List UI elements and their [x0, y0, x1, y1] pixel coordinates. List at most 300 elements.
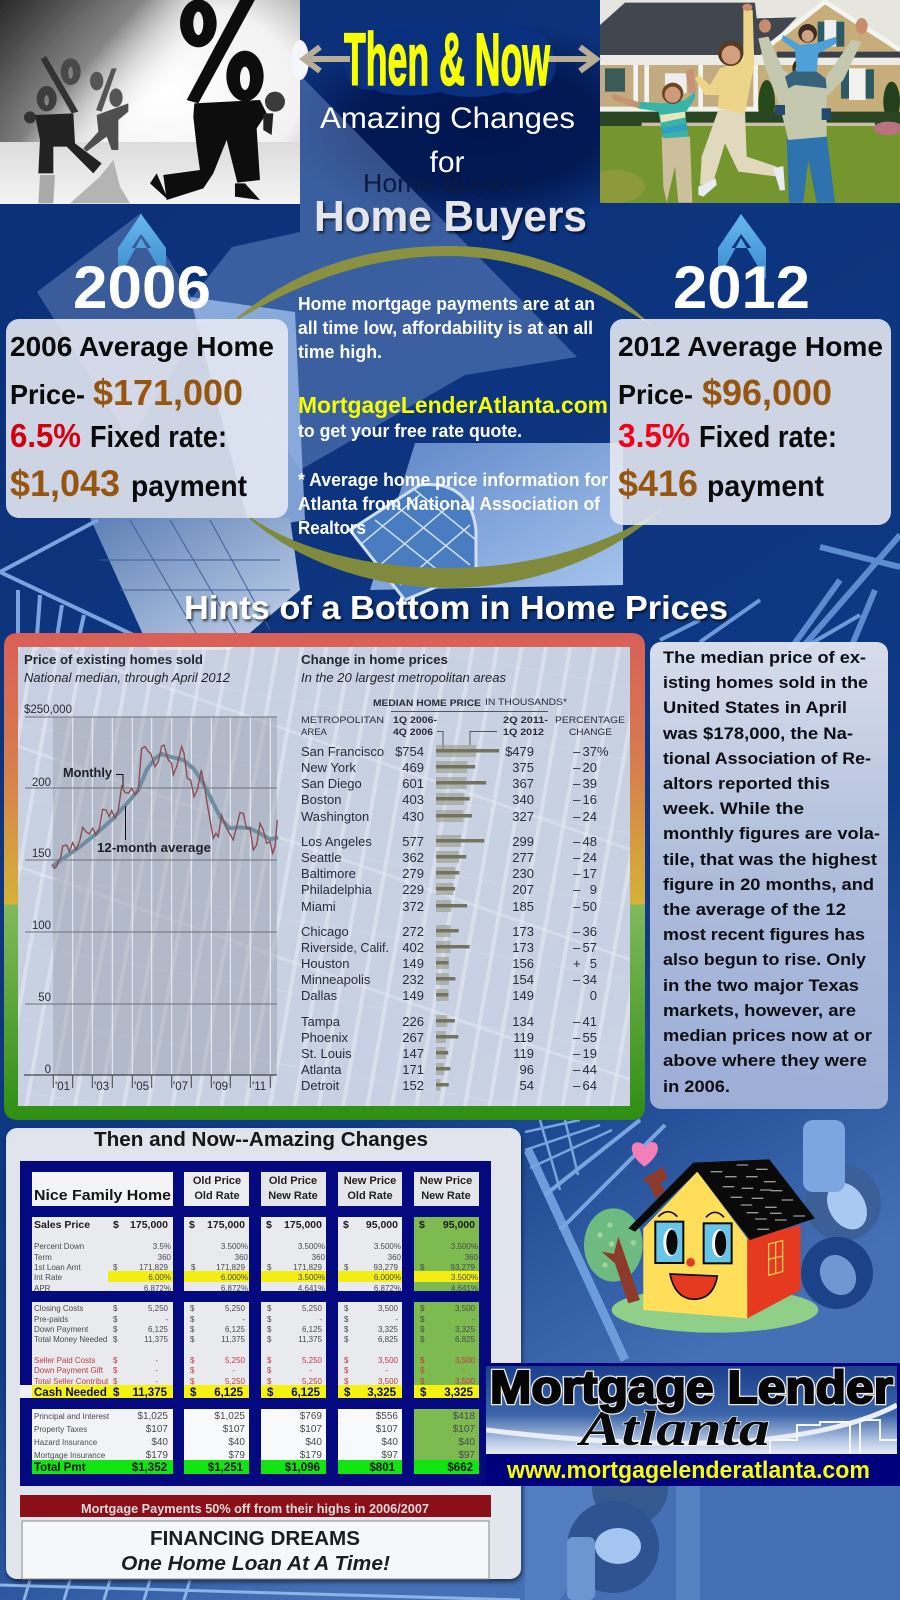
column: new price old rate: $97 — [381, 1450, 398, 1461]
column headers: Old Rate — [347, 1190, 393, 1202]
chart: price of existing homes sold: 0 — [45, 1064, 51, 1076]
table rows: 41 — [583, 1014, 597, 1029]
table rows: 272 — [402, 924, 424, 939]
table: change in home prices: CHANGE — [569, 727, 612, 738]
table rows: – — [573, 972, 581, 987]
panel: median price commentary: week. While the — [662, 799, 804, 818]
column: new price old rate: 6.000% — [374, 1273, 401, 1282]
table rows: $754 — [395, 744, 424, 759]
column: old price old rate: 6,125 — [225, 1325, 246, 1334]
column: labels: Total Money Needed — [34, 1335, 107, 1344]
panel: 2006 card: payment — [131, 470, 247, 503]
table rows: Boston — [301, 792, 341, 807]
chart: price of existing homes sold: 200 — [32, 777, 51, 789]
column: old price old rate: 5,250 — [225, 1377, 246, 1386]
chart: price of existing homes sold: Price of existing homes sold — [24, 652, 203, 667]
column: labels: - — [165, 1315, 168, 1324]
table rows: 299 — [512, 834, 534, 849]
table rows: 149 — [402, 988, 424, 1003]
table rows: 64 — [583, 1078, 597, 1093]
column: labels: Hazard Insurance — [34, 1438, 98, 1447]
text block: center mortgage message: Home mortgage payments are at an — [298, 294, 595, 314]
column headers: Old Rate — [194, 1190, 240, 1202]
table rows: 9 — [590, 882, 597, 897]
column: labels: Down Payment Gift — [34, 1366, 104, 1375]
panel: 2012 card: $416 — [618, 463, 698, 504]
table rows: 119 — [513, 1046, 534, 1061]
column: new price old rate: 3,500 — [378, 1304, 399, 1313]
panel: 2006 card: $1,043 — [10, 463, 120, 504]
chart: price of existing homes sold: '09 — [213, 1081, 228, 1093]
column: new price new rate: 3,500 — [455, 1356, 476, 1365]
column: old price new rate: $ — [267, 1304, 272, 1313]
column: new price old rate: $ — [344, 1325, 349, 1334]
column: old price old rate: $ — [190, 1366, 195, 1375]
table rows: San Diego — [301, 776, 362, 791]
column: labels: $ — [113, 1377, 118, 1386]
column: new price new rate: $662 — [447, 1462, 473, 1474]
column: new price old rate: 6,825 — [378, 1335, 399, 1344]
column: new price new rate: $ — [420, 1263, 425, 1272]
column: new price old rate: 3,500 — [378, 1377, 399, 1386]
girl on the left — [612, 68, 696, 203]
column: new price new rate: $ — [420, 1335, 425, 1344]
table rows: 277 — [512, 850, 534, 865]
table rows: 134 — [512, 1014, 534, 1029]
column: new price old rate: $801 — [369, 1462, 396, 1474]
panel: median price commentary: in the two major Texas — [663, 976, 859, 995]
column: old price old rate: $107 — [223, 1424, 245, 1435]
panel: median price commentary: the average of the 12 — [663, 900, 846, 919]
column: old price new rate: 3.500% — [298, 1273, 325, 1282]
column: new price old rate: $ — [344, 1366, 349, 1375]
column: labels: 360 — [158, 1253, 172, 1262]
table rows: 267 — [402, 1030, 424, 1045]
table rows: 36 — [583, 924, 597, 939]
column: labels: - — [155, 1356, 158, 1365]
callout: monthly: Monthly — [63, 766, 112, 780]
olive arc top — [230, 246, 652, 326]
panel: median price commentary: median prices now at or — [663, 1026, 872, 1045]
column headers: Old Price — [193, 1175, 241, 1187]
column: old price old rate: $ — [190, 1356, 195, 1365]
column: new price new rate — [419, 1219, 479, 1474]
panel: median price commentary: in 2006. — [663, 1077, 730, 1096]
column: old price old rate: $1,251 — [208, 1462, 244, 1474]
logo: Mortgage Lender Atlanta: Mortgage Lender — [490, 1361, 893, 1413]
table rows: Philadelphia — [301, 882, 373, 897]
chart: price of existing homes sold: '03 — [94, 1081, 109, 1093]
column: labels: $ — [113, 1315, 118, 1324]
table rows: – — [573, 882, 581, 897]
text block: center mortgage message: all time low, affordability is at an all — [298, 318, 593, 338]
column headers: New Rate — [421, 1190, 471, 1202]
column: old price new rate: 5,250 — [302, 1356, 323, 1365]
column: labels: 3.5% — [153, 1242, 171, 1251]
box: financing dreams — [22, 1521, 489, 1579]
column: old price new rate: $179 — [300, 1450, 322, 1461]
title: Then & Now with arrows — [304, 18, 596, 101]
text block: center mortgage message: Realtors — [298, 518, 366, 538]
column: labels: $1,352 — [132, 1462, 167, 1474]
panel: 2012 card: 2012 Average Home — [618, 331, 883, 362]
panel: then and now comparison: Then and Now--Amazing Changes — [94, 1129, 428, 1151]
panel: median price commentary: tional Association of Re- — [663, 749, 871, 768]
column: labels: $ — [113, 1219, 119, 1231]
panel: median price commentary: monthly figures are vola- — [663, 824, 880, 843]
arrow: left — [304, 47, 350, 71]
column: new price new rate: $ — [419, 1219, 425, 1231]
arrow: right — [548, 47, 596, 71]
column: new price new rate: 4.641% — [451, 1284, 478, 1293]
table rows: 375 — [512, 760, 534, 775]
table rows: 403 — [402, 792, 424, 807]
panel: median price commentary: isting homes sold in the — [663, 673, 868, 692]
column: new price old rate: 3,325 — [367, 1387, 397, 1399]
photo: happy family jumping in front of house — [585, 0, 900, 205]
column: old price old rate: 6.872% — [221, 1284, 248, 1293]
table rows: 152 — [402, 1078, 424, 1093]
table rows: – — [573, 1046, 581, 1061]
column: labels: 1st Loan Amt — [34, 1263, 81, 1272]
column: new price old rate: $ — [344, 1335, 349, 1344]
column: new price old rate: $107 — [376, 1424, 398, 1435]
column: labels: Pre-paids — [34, 1315, 68, 1324]
panel: median price commentary: altors reported this — [663, 774, 830, 793]
column: old price new rate: 6,125 — [302, 1325, 323, 1334]
column: new price old rate: $ — [344, 1304, 349, 1313]
column: old price old rate: - — [242, 1315, 245, 1324]
table rows: 149 — [512, 988, 534, 1003]
icon: house arrow left — [118, 214, 166, 280]
column: labels: Closing Costs — [34, 1304, 83, 1313]
column: old price old rate: 5,250 — [225, 1304, 246, 1313]
column: new price new rate: $97 — [458, 1450, 475, 1461]
panel: 2006 card: 2006 Average Home — [10, 331, 274, 362]
panel: median price commentary: most recent figures has — [663, 925, 865, 944]
table rows: Minneapolis — [301, 972, 371, 987]
column: new price new rate: $40 — [458, 1437, 475, 1448]
table rows: 119 — [513, 1030, 534, 1045]
table rows: 367 — [512, 776, 534, 791]
column: old price new rate: - — [319, 1315, 322, 1324]
table rows: % — [597, 744, 609, 759]
column: labels: Total Seller Contribut — [34, 1377, 109, 1386]
table rows: 279 — [402, 866, 424, 881]
column: labels: $ — [113, 1335, 118, 1344]
column: old price new rate: $107 — [300, 1424, 322, 1435]
column: new price old rate: - — [395, 1315, 398, 1324]
column: new price old rate — [343, 1219, 402, 1474]
column: labels: $ — [113, 1366, 118, 1375]
column: old price old rate: 5,250 — [225, 1356, 246, 1365]
column: labels: 5,250 — [148, 1304, 169, 1313]
table rows: St. Louis — [301, 1046, 352, 1061]
column: new price new rate: $ — [420, 1315, 425, 1324]
table rows: – — [573, 809, 581, 824]
column: new price old rate: 360 — [388, 1253, 402, 1262]
column headers: New Price — [344, 1175, 396, 1187]
table rows: 340 — [512, 792, 534, 807]
table rows: – — [573, 776, 581, 791]
bars — [436, 745, 499, 1091]
column: labels: Mortgage Insurance — [34, 1451, 106, 1460]
column: labels: $1,025 — [137, 1411, 168, 1422]
column: labels: - — [155, 1366, 158, 1375]
table rows: Detroit — [301, 1078, 340, 1093]
column: old price new rate: 11,375 — [298, 1335, 323, 1344]
chart: price of existing homes sold: 100 — [32, 920, 51, 932]
column headers: Old Price — [269, 1175, 317, 1187]
text block: center mortgage message: * Average home price information for — [298, 470, 608, 490]
table rows: – — [573, 1078, 581, 1093]
subtitle: for — [429, 146, 465, 179]
table rows: 16 — [583, 792, 597, 807]
table: change in home prices: PERCENTAGE — [555, 715, 625, 726]
column: labels: $ — [113, 1304, 118, 1313]
column: new price new rate: 3,325 — [455, 1325, 476, 1334]
table: change in home prices: AREA — [301, 727, 328, 738]
panel: chart frame — [4, 633, 645, 1120]
table rows: 229 — [402, 882, 424, 897]
column: old price old rate: - — [232, 1366, 235, 1375]
column: old price old rate: $40 — [228, 1437, 245, 1448]
column: labels: Term — [34, 1253, 52, 1262]
chart: price of existing homes sold: '05 — [134, 1081, 149, 1093]
column: old price new rate: $ — [266, 1219, 272, 1231]
table rows: 44 — [583, 1062, 597, 1077]
panel: median price commentary: markets, however, are — [663, 1001, 856, 1020]
subtitle — [320, 102, 575, 179]
table rows: 402 — [402, 940, 424, 955]
column: new price old rate: 95,000 — [366, 1219, 398, 1231]
chart: price of existing homes sold: 150 — [32, 848, 51, 860]
column: old price old rate: $79 — [228, 1450, 245, 1461]
box: financing dreams: One Home Loan At A Time! — [121, 1553, 390, 1575]
column: new price new rate: 360 — [465, 1253, 479, 1262]
column: old price new rate: 171,829 — [293, 1263, 323, 1272]
panel: median price commentary: The median price of ex- — [663, 648, 866, 667]
column: old price new rate: $ — [267, 1387, 274, 1399]
column: labels: Int Rate — [34, 1273, 63, 1282]
table rows: 149 — [402, 956, 424, 971]
text block: center mortgage message: time high. — [298, 342, 382, 362]
column: labels: 175,000 — [130, 1219, 168, 1231]
table rows: 5 — [590, 956, 597, 971]
column: new price old rate: $ — [344, 1356, 349, 1365]
column: old price old rate: 11,375 — [221, 1335, 246, 1344]
table rows: 185 — [512, 899, 534, 914]
ghost text behind title: Home Buyers — [363, 168, 525, 198]
column: new price old rate: 3,500 — [378, 1356, 399, 1365]
column: old price new rate: $769 — [300, 1411, 322, 1422]
column: labels: - — [155, 1377, 158, 1386]
table rows: 24 — [583, 809, 597, 824]
column: labels: $ — [113, 1263, 118, 1272]
table rows: Seattle — [301, 850, 341, 865]
column: old price old rate: $ — [190, 1335, 195, 1344]
panel: median price commentary: tile, that was the highest — [663, 850, 877, 869]
table rows: 430 — [402, 809, 424, 824]
table rows: 154 — [512, 972, 534, 987]
table rows: 601 — [402, 776, 424, 791]
column: new price new rate: 3,500 — [455, 1304, 476, 1313]
column: labels: $107 — [146, 1424, 168, 1435]
column: new price old rate: 3.500% — [374, 1242, 401, 1251]
text block: center mortgage message: to get your free rate quote. — [298, 421, 522, 441]
column: new price new rate: 95,000 — [443, 1219, 475, 1231]
table rows: $479 — [505, 744, 534, 759]
table: change in home prices: 1Q 2006- — [393, 715, 437, 726]
table rows: 173 — [512, 940, 534, 955]
table rows: – — [573, 940, 581, 955]
column: labels: Down Payment — [34, 1325, 89, 1334]
column: old price old rate: $ — [190, 1325, 195, 1334]
column: new price new rate: $107 — [453, 1424, 475, 1435]
column: old price new rate: 5,250 — [302, 1377, 323, 1386]
column: labels: $40 — [151, 1437, 168, 1448]
panel: 2006 card — [6, 319, 288, 518]
table rows: – — [573, 834, 581, 849]
banner: mortgage payments — [20, 1495, 491, 1517]
chart: price of existing homes sold: $250,000 — [24, 704, 72, 716]
column: new price new rate: 93,279 — [451, 1263, 476, 1272]
column: new price new rate: - — [472, 1315, 475, 1324]
column: labels: Cash Needed — [34, 1387, 107, 1399]
table rows: San Francisco — [301, 744, 384, 759]
panel: then and now comparison — [6, 1128, 521, 1579]
column: old price new rate: $ — [267, 1315, 272, 1324]
panel: 2012 card: Price- — [618, 379, 693, 410]
table rows: Phoenix — [301, 1030, 348, 1045]
table rows: 0 — [590, 988, 597, 1003]
icon: smiling cartoon house — [584, 1142, 818, 1333]
column: new price old rate: 6.872% — [374, 1284, 401, 1293]
column: new price new rate: $ — [420, 1325, 425, 1334]
column: new price new rate: $ — [420, 1377, 425, 1386]
table rows: + — [573, 956, 581, 971]
table rows: 17 — [583, 866, 597, 881]
table rows: Tampa — [301, 1014, 341, 1029]
column headers: Nice Family Home — [34, 1187, 171, 1204]
table rows: – — [573, 1030, 581, 1045]
column: new price new rate: 3.500% — [451, 1273, 478, 1282]
column: old price old rate: $ — [190, 1387, 197, 1399]
table rows: Baltimore — [301, 866, 356, 881]
callout: monthly — [63, 766, 123, 787]
column: labels: Sales Price — [34, 1219, 90, 1231]
column: labels: Property Taxes — [34, 1425, 87, 1434]
table: change in home prices: METROPOLITAN — [301, 715, 384, 726]
column: labels: Seller Paid Costs — [34, 1356, 95, 1365]
column: old price new rate: $1,096 — [285, 1462, 320, 1474]
column: old price new rate: $ — [267, 1263, 272, 1272]
column: old price new rate: $ — [267, 1335, 272, 1344]
column: old price old rate: $ — [191, 1263, 196, 1272]
panel: median price commentary — [650, 642, 888, 1109]
table rows: Miami — [301, 899, 336, 914]
section fills — [20, 1217, 479, 1474]
column: new price old rate: $ — [344, 1387, 351, 1399]
column: new price old rate: $ — [344, 1263, 349, 1272]
table rows: 54 — [520, 1078, 534, 1093]
table rows: 39 — [583, 776, 597, 791]
column: labels: APR — [34, 1284, 51, 1293]
column: labels: 6.00% — [148, 1273, 171, 1282]
column: labels: 6.872% — [144, 1284, 171, 1293]
column headers: New Rate — [268, 1190, 318, 1202]
panel: median price commentary: was $178,000, the Na- — [662, 724, 853, 743]
column: new price new rate: $ — [420, 1387, 427, 1399]
table: change in home prices: 1Q 2012 — [503, 727, 544, 738]
callout: 12-month average — [97, 806, 211, 855]
column: old price old rate: $ — [190, 1315, 195, 1324]
monthly line — [52, 745, 277, 868]
panel: 2012 card: payment — [707, 470, 824, 503]
table rows: 372 — [402, 899, 424, 914]
table rows: 362 — [402, 850, 424, 865]
table rows: 147 — [402, 1046, 424, 1061]
panel: median price commentary: figure in 20 months, and — [663, 875, 874, 894]
column: old price new rate — [266, 1219, 326, 1474]
table rows: New York — [301, 760, 356, 775]
table rows: – — [573, 1014, 581, 1029]
column: new price old rate: $ — [343, 1219, 349, 1231]
logo: Mortgage Lender Atlanta: Mortgage Lender — [490, 1361, 893, 1413]
table rows: – — [573, 792, 581, 807]
panel: 2006 card: $171,000 — [93, 372, 243, 413]
column: new price new rate: 3,325 — [444, 1387, 474, 1399]
column: old price old rate: $ — [189, 1219, 195, 1231]
table rows: 171 — [402, 1062, 424, 1077]
column: labels: 171,829 — [139, 1263, 169, 1272]
table rows: 327 — [512, 809, 534, 824]
column: labels: Principal and Interest — [34, 1412, 110, 1421]
table: change in home prices: MEDIAN HOME PRICE — [373, 698, 481, 708]
logo: Mortgage Lender Atlanta — [486, 1361, 900, 1486]
column: old price old rate: 360 — [235, 1253, 249, 1262]
column: old price old rate — [189, 1219, 249, 1474]
table: change in home prices: In the 20 largest metropolitan areas — [301, 671, 506, 685]
table: change in home prices: 2Q 2011- — [503, 715, 548, 726]
box: financing dreams: FINANCING DREAMS — [150, 1528, 360, 1550]
table rows: – — [573, 866, 581, 881]
chart: price of existing homes sold: '11 — [252, 1081, 266, 1093]
table rows: 469 — [402, 760, 424, 775]
panel: 2012 card: 3.5% — [618, 417, 690, 454]
table rows: 96 — [520, 1062, 534, 1077]
column: old price new rate: $ — [267, 1356, 272, 1365]
banner: mortgage payments: Mortgage Payments 50% off from their highs in 2006/2007 — [81, 1501, 429, 1516]
panel: 2012 card: Fixed rate: — [699, 419, 837, 454]
table rows: Houston — [301, 956, 349, 971]
table: change in home prices: IN THOUSANDS* — [485, 697, 568, 707]
logo: Mortgage Lender Atlanta: Atlanta — [576, 1400, 770, 1456]
column: labels: Total Pmt — [34, 1462, 86, 1474]
column: labels: $ — [113, 1387, 120, 1399]
column: labels: Percent Down — [34, 1242, 84, 1251]
panel: 2006 card: Fixed rate: — [90, 419, 227, 454]
table rows: 48 — [583, 834, 597, 849]
table rows: 24 — [583, 850, 597, 865]
table rows: – — [573, 744, 581, 759]
12-month average line — [52, 754, 278, 867]
column: old price old rate: $ — [190, 1304, 195, 1313]
title: Then & Now with arrows: Then & Now — [344, 18, 550, 101]
chart: price of existing homes sold: '01 — [55, 1081, 70, 1093]
year 2012: 2012 — [673, 254, 810, 321]
table rows: – — [573, 1062, 581, 1077]
